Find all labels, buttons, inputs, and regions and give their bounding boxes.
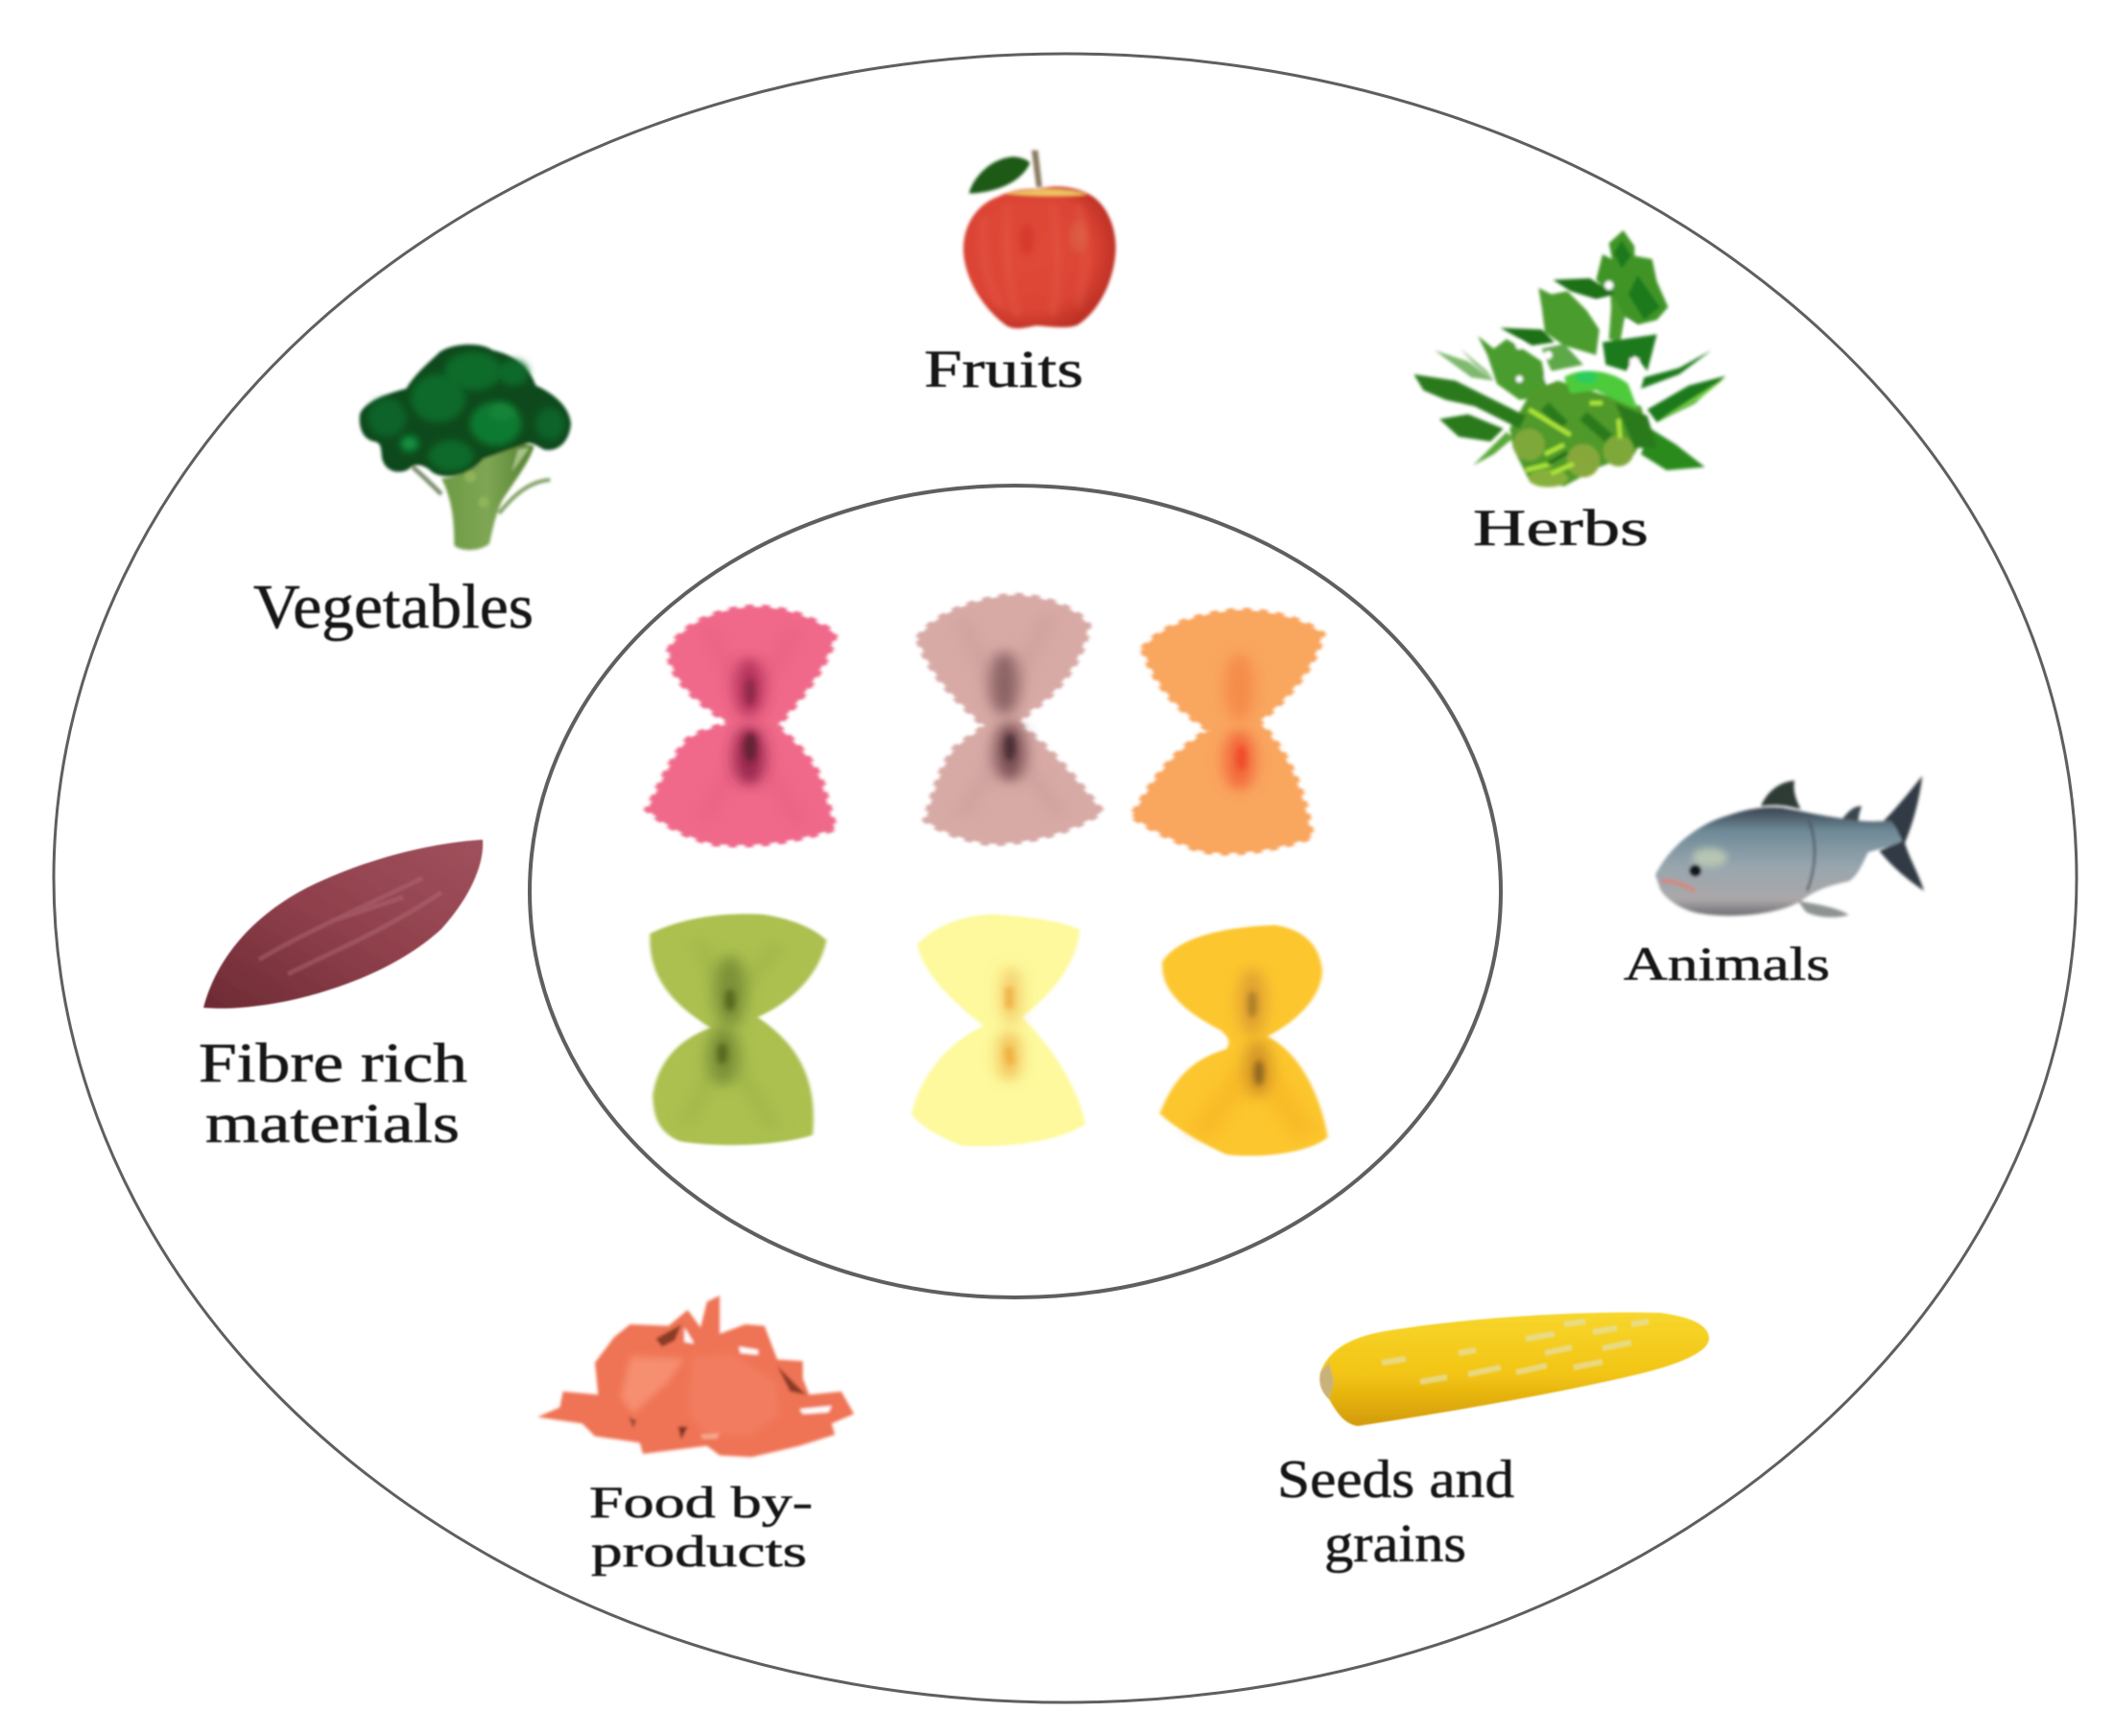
icon: herbs [1413, 230, 1725, 488]
icon: fish [1655, 775, 1924, 917]
pasta: orange farfalle [1132, 610, 1322, 853]
inner ring: coloured pasta [530, 486, 1501, 1297]
label: Animals: Animals [1624, 937, 1830, 990]
label: Fibre rich materials [199, 1032, 467, 1154]
label: Seeds and grains: Seeds and [1277, 1450, 1514, 1510]
pasta: mauve farfalle [918, 595, 1102, 844]
label: Food by-products: Food by- [589, 1478, 813, 1528]
label: Seeds and grains [1277, 1450, 1514, 1574]
pasta: pale yellow farfalle [912, 915, 1085, 1146]
icon: apple [963, 151, 1116, 328]
label: Vegetables: Vegetables [253, 572, 534, 642]
label: Food by-products: products [591, 1527, 807, 1577]
icon: corn cob [1319, 1313, 1709, 1426]
icon: broccoli [360, 345, 571, 550]
icon: sweet potato [203, 840, 483, 1009]
label: Herbs: Herbs [1473, 499, 1649, 557]
label: Food by-products [589, 1478, 813, 1577]
icon: food by-products [537, 1296, 854, 1457]
label: Fruits: Fruits [924, 340, 1083, 398]
pasta: golden farfalle [1160, 925, 1328, 1155]
label: Fibre rich materials: Fibre rich [199, 1032, 467, 1094]
label: Fibre rich materials: materials [205, 1092, 460, 1154]
pasta: pink farfalle [648, 607, 835, 845]
pasta group: six coloured farfalle [648, 595, 1328, 1155]
label: Seeds and grains: grains [1324, 1514, 1466, 1574]
pasta: green farfalle [650, 914, 826, 1145]
